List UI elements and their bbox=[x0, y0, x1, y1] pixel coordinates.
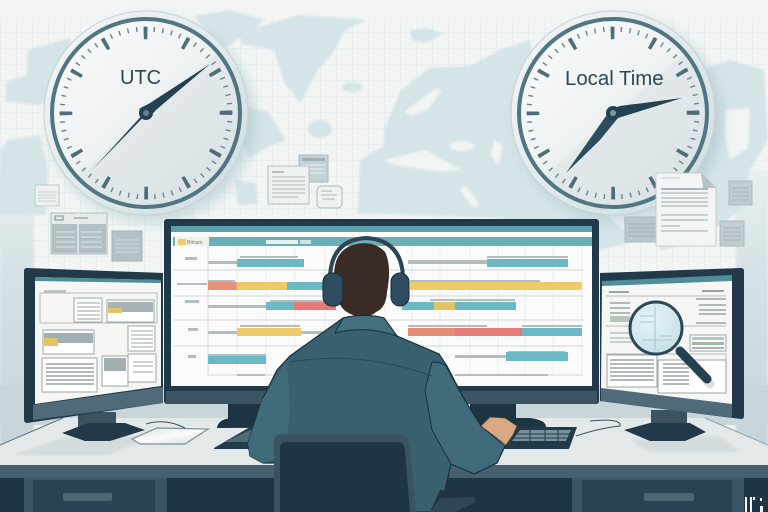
gantt screen bbox=[171, 226, 592, 386]
map inland water bbox=[384, 88, 750, 208]
corner speckle bbox=[745, 497, 763, 512]
tablet and cables on desk bbox=[132, 420, 620, 444]
floating documents: left bbox=[35, 185, 142, 261]
floating documents: centre bbox=[268, 155, 342, 208]
trousers bbox=[430, 490, 516, 512]
document: open book bbox=[51, 213, 107, 254]
drawer unit: right bbox=[572, 478, 744, 512]
clock: Local Time bbox=[511, 11, 722, 223]
hair bbox=[334, 243, 389, 316]
document: back sheet bbox=[299, 155, 328, 182]
desk bbox=[0, 418, 768, 512]
label: UTC: UTC bbox=[120, 67, 161, 89]
document: large page bbox=[656, 173, 716, 246]
person at desk bbox=[248, 238, 517, 512]
document: grey sheet bbox=[112, 231, 142, 261]
jacket sleeve right bbox=[425, 362, 505, 474]
gantt bars bbox=[208, 256, 582, 376]
drawer unit: left bbox=[24, 478, 167, 512]
centre monitor bbox=[164, 219, 599, 404]
right monitor bbox=[600, 268, 744, 441]
document: grey sheet left bbox=[625, 217, 669, 242]
stand bbox=[62, 412, 145, 441]
document: report sheet bbox=[268, 166, 309, 204]
clock hands: Local Time bbox=[566, 98, 682, 173]
centre monitor stand bbox=[217, 400, 546, 428]
headphone band bbox=[330, 238, 403, 285]
document: grey sheet lower bbox=[720, 221, 744, 246]
document: small note bbox=[35, 185, 59, 206]
screen with tables bbox=[35, 277, 161, 404]
jacket sleeve left bbox=[248, 360, 290, 463]
screen with tables bbox=[601, 275, 732, 404]
icon: magnifying glass bbox=[630, 302, 710, 384]
document: small card bbox=[317, 186, 342, 208]
floating documents: right bbox=[625, 173, 752, 246]
header label bbox=[175, 237, 209, 246]
header label: Bitrium bbox=[187, 240, 203, 246]
chair arm bbox=[430, 497, 476, 512]
stand bbox=[624, 410, 706, 441]
clock: UTC bbox=[44, 11, 255, 223]
chair back bbox=[274, 434, 416, 512]
row labels bbox=[177, 257, 207, 358]
jacket bbox=[248, 316, 505, 512]
world map bbox=[0, 10, 768, 250]
left monitor bbox=[24, 268, 163, 441]
hand bbox=[481, 417, 517, 445]
document: grey sheet upper bbox=[729, 181, 752, 205]
label: Local Time: Local Time bbox=[565, 68, 664, 90]
keyboard bbox=[214, 427, 577, 449]
clock hands: UTC bbox=[91, 64, 210, 171]
headphone cups bbox=[323, 273, 409, 306]
